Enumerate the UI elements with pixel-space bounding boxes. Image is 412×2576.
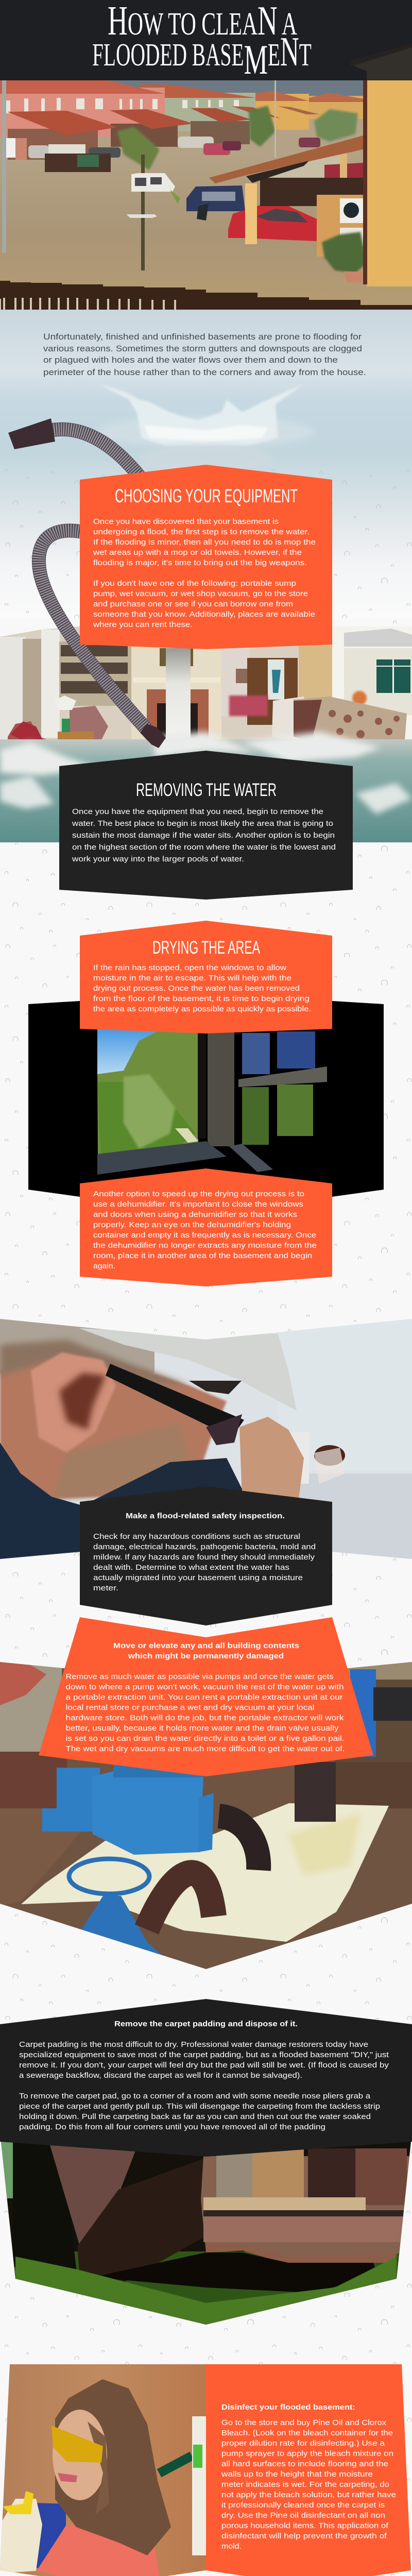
text: dehumidifier body: the dehumidifier no longer extracts any moisture from the xyxy=(93,1241,317,1250)
text: equipment body: If the flooding is minor, then all you need to do is mop the xyxy=(93,538,316,547)
text: carpet body: specialized equipment to save most of the carpet padding, but as a flooded basement "DIY," just xyxy=(19,2050,389,2059)
text: equipment body: and purchase one or see if you can borrow one from xyxy=(93,600,293,608)
text: move body: is set so you can drain the water directly into a toilet or a five gallon pail. xyxy=(66,1734,344,1743)
panel: move or elevate contents xyxy=(39,1617,373,1776)
text: removing body xyxy=(72,807,336,863)
text: dehumidifier body: Another option to speed up the drying out process is to xyxy=(93,1190,304,1198)
panel: choosing your equipment xyxy=(80,465,332,649)
text: safety body: dealt with. Determine to what extent the water has xyxy=(93,1563,289,1572)
text: carpet body: holding it down. Pull the carpeting back as far as you can and then cut out the water soaked xyxy=(19,2112,371,2121)
text: drying body: drying out process. Once the water has been removed xyxy=(93,984,300,993)
text: move body: hardware store. Both will do the job, but the portable extractor will work xyxy=(66,1714,344,1722)
text: move body xyxy=(66,1672,345,1753)
text: move body: better, usually, because it holds more water and the drain valve usually xyxy=(66,1724,339,1733)
text: carpet body: remove it. If you don't, your carpet will feel dry but the pad will still be wet. (If flood is caused by xyxy=(19,2061,389,2070)
text: move body: down to where a pump won't work, vacuum the rest of the water up with xyxy=(66,1683,344,1691)
text: move body: Remove as much water as possible via pumps and once the water gets xyxy=(66,1672,334,1681)
text: removing body: on the highest section of the room where the water is the lowest and xyxy=(72,843,336,852)
panel: remove the carpet padding xyxy=(0,1999,412,2157)
heading: choosing your equipment: CHOOSING YOUR EQUIPMENT xyxy=(115,485,298,506)
photo: open window xyxy=(28,1001,384,1197)
text: drying body: If the rain has stopped, open the windows to allow xyxy=(93,963,286,972)
text: dehumidifier body: and doors when using a dehumidifier so that it works xyxy=(93,1210,297,1219)
title band xyxy=(0,0,412,80)
panel: drying the area xyxy=(80,921,332,1033)
text: drying body: the area as completely as possible as quickly as possible. xyxy=(93,1005,311,1013)
text: carpet body: piece of the carpet and gently pull up. This will disengage the carpeting from the tackless strip xyxy=(19,2102,380,2111)
text: disinfect body: not apply the bleach solution, but rather have xyxy=(221,2490,396,2499)
text: dehumidifier body: container and empty it as frequently as is necessary. Once xyxy=(93,1231,316,1240)
text: dehumidifier body: room, place it in another area of the basement and begin xyxy=(93,1251,312,1260)
heading: move or elevate xyxy=(113,1641,299,1660)
text: equipment body xyxy=(93,517,316,629)
photo: carpet on line xyxy=(0,2138,412,2329)
intro paragraph: various reasons. Sometimes the storm gutters and downspouts are clogged xyxy=(43,344,362,353)
icon: vacuum hose lower xyxy=(39,531,166,748)
heading: disinfect: Disinfect your flooded basement: xyxy=(221,2403,355,2412)
text: move body: local rental store or purchase a wet and dry vacuum at your local xyxy=(66,1703,314,1712)
text: disinfect body xyxy=(221,2418,396,2551)
intro paragraph: Unfortunately, finished and unfinished basements are prone to flooding for xyxy=(43,332,362,342)
text: disinfect body: Go to the store and buy Pine Oil and Clorox xyxy=(221,2418,387,2427)
text: equipment body: someone that you know. Additionally, places are available xyxy=(93,610,315,619)
text: safety body: damage, electrical hazards, pathogenic bacteria, mold and xyxy=(93,1543,316,1551)
text: safety body: Check for any hazardous conditions such as structural xyxy=(93,1532,300,1541)
text: disinfect body: dry. Use the Pine oil disinfectant on all non xyxy=(221,2511,385,2520)
heading: safety inspection: Make a flood-related safety inspection. xyxy=(126,1512,285,1520)
icon: vacuum hose upper xyxy=(8,418,142,479)
text: disinfect body: mold. xyxy=(221,2542,242,2551)
text: disinfect body: Bleach. (Look on the bleach container for the xyxy=(221,2429,393,2437)
text: dehumidifier body: again. xyxy=(93,1262,115,1270)
text: move body: The wet and dry vacuums are much more difficult to get the water out of. xyxy=(66,1744,345,1753)
text: drying body: from the floor of the basement, it is time to begin drying xyxy=(93,994,310,1003)
text: safety body: mildew. If any hazards are found they should immediately xyxy=(93,1553,315,1562)
intro paragraph xyxy=(43,332,366,377)
photo: pipes and valves xyxy=(0,1659,412,1973)
text: carpet body: a sewerage backflow, discard the carpet as well for it cannot be salvaged). xyxy=(19,2071,302,2080)
intro paragraph: perimeter of the house rather than to the corners and away from the house. xyxy=(43,367,366,377)
text: drying body xyxy=(93,963,311,1013)
text: equipment body: pump, wet vacuum, or wet shop vacuum, go to the store xyxy=(93,589,308,598)
intro paragraph: or plagued with holes and the water flows over them and down to the xyxy=(43,355,338,365)
text: equipment body: flooding is major, it's time to bring out the big weapons. xyxy=(93,558,307,567)
text: dehumidifier body: properly. Keep an eye on the dehumidifier's holding xyxy=(93,1221,291,1229)
heading: move or elevate: which might be permanently damaged xyxy=(128,1652,284,1660)
text: disinfect body: all hard surfaces to include flooring and the xyxy=(221,2460,388,2468)
title: M xyxy=(244,36,268,83)
text: drying body: moisture in the air to escape. This will help with the xyxy=(93,974,291,982)
text: removing body: work your way into the larger pools of water. xyxy=(72,855,244,863)
panel: removing the water xyxy=(59,751,353,900)
text: carpet body: padding. Do this from all four corners until you have removed all of the padding xyxy=(19,2123,325,2131)
text: disinfect body: porous household items. This application of xyxy=(221,2521,389,2530)
panel: dehumidifier xyxy=(80,1168,332,1286)
text: move body: a portable extraction unit. You can rent a portable extraction unit at our xyxy=(66,1693,343,1702)
photo: water splash xyxy=(98,384,314,474)
text: carpet body: Carpet padding is the most difficult to dry. Professional water damage restorers today have xyxy=(19,2040,368,2049)
heading: drying the area: DRYING THE AREA xyxy=(152,938,260,958)
text: disinfect body: disinfectant will help prevent the growth of xyxy=(221,2532,387,2540)
text: equipment body: where you can rent these. xyxy=(93,620,193,629)
text: disinfect body: it professionally cleaned once the carpet is xyxy=(221,2501,385,2510)
text: equipment body: wet areas up with a mop or old towels. However, if the xyxy=(93,548,302,557)
photo: electrician with hard hat xyxy=(0,1316,412,1561)
text: carpet body: To remove the carpet pad, go to a corner of a room and with some needle nose pliers grab a xyxy=(19,2092,371,2100)
text: equipment body: undergoing a flood, the first step is to remove the water. xyxy=(93,528,310,536)
panel: safety inspection xyxy=(80,1486,332,1625)
text: safety body xyxy=(93,1532,316,1592)
heading: move or elevate: Move or elevate any and all building contents xyxy=(113,1641,299,1650)
title: NT xyxy=(280,28,312,75)
text: disinfect body: pump sprayer to apply the bleach mixture on xyxy=(221,2449,393,2458)
photo: woman with mop xyxy=(0,2364,206,2576)
heading: removing the water: REMOVING THE WATER xyxy=(136,780,277,800)
text: removing body: water. The best place to begin is most likely the area that is going to xyxy=(72,819,333,828)
text: equipment body: Once you have discovered that your basement is xyxy=(93,517,279,526)
text: disinfect body: proper dilution rate for disinfecting.) Use a xyxy=(221,2439,385,2448)
heading: remove the carpet padding: Remove the carpet padding and dispose of it. xyxy=(114,2020,298,2028)
photo: flooded living room xyxy=(0,626,412,842)
text: equipment body: If you don't have one of the following: portable sump xyxy=(93,579,296,588)
title xyxy=(92,0,312,83)
text: disinfect body: meter indicates is wet. For the carpeting, do xyxy=(221,2480,389,2489)
photo: flooded street xyxy=(0,80,412,310)
text: removing body: Once you have the equipment that you need, begin to remove the xyxy=(72,807,323,816)
text: carpet body xyxy=(19,2040,389,2131)
text: safety body: meter. xyxy=(93,1584,118,1592)
text: removing body: sustain the most damage if the water sits. Another option is to begin xyxy=(72,831,335,840)
panel: disinfect xyxy=(206,2364,411,2576)
text: dehumidifier body xyxy=(93,1190,317,1270)
title: FLOODED BASE xyxy=(92,38,244,73)
text: disinfect body: walls up to the height that the moisture xyxy=(221,2470,373,2479)
text: safety body: actually migrated into your basement using a moisture xyxy=(93,1573,303,1582)
title: E xyxy=(268,38,280,73)
text: dehumidifier body: use a dehumidifier. It's important to close the windows xyxy=(93,1200,303,1209)
